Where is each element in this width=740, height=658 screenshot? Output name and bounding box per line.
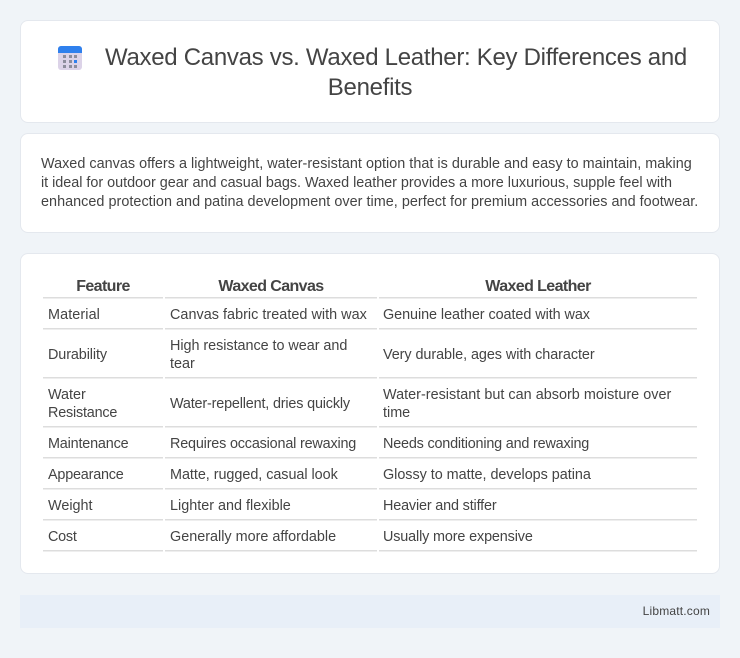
title: Benefits xyxy=(328,74,412,101)
intro text: enhanced protection and patina development over time, perfect for premium accessories and footwear. xyxy=(41,194,698,210)
row: cost: Generally more affordable xyxy=(170,529,336,545)
row: material: Material xyxy=(48,307,100,323)
row: maintenance: Requires occasional rewaxing xyxy=(170,436,356,452)
row: cost: Cost xyxy=(48,529,77,545)
row: weight xyxy=(48,498,496,514)
row: weight: Heavier and stiffer xyxy=(383,498,496,514)
row: maintenance: Maintenance xyxy=(48,436,128,452)
row: material: Canvas fabric treated with wax xyxy=(170,307,367,323)
row: water resistance: Water-repellent, dries quickly xyxy=(170,396,350,412)
column headers: Waxed Canvas xyxy=(218,278,324,295)
row: water resistance: Resistance xyxy=(48,405,117,421)
intro text: Waxed canvas offers a lightweight, water-resistant option that is durable and easy to maintain, making xyxy=(41,156,692,172)
row: cost xyxy=(48,529,533,545)
row: water resistance: Water-resistant but can absorb moisture over xyxy=(383,387,671,403)
column headers: Feature xyxy=(76,278,130,295)
row: durability: tear xyxy=(170,356,195,372)
row: water resistance: time xyxy=(383,405,410,421)
column headers xyxy=(76,278,592,295)
row: material xyxy=(48,307,590,323)
row: durability: Durability xyxy=(48,347,107,363)
table card xyxy=(20,253,720,574)
header card xyxy=(20,20,720,123)
row: appearance: Matte, rugged, casual look xyxy=(170,467,338,483)
row: maintenance: Needs conditioning and rewaxing xyxy=(383,436,589,452)
intro card xyxy=(20,133,720,233)
row: weight: Lighter and flexible xyxy=(170,498,291,514)
column headers: Waxed Leather xyxy=(485,278,591,295)
intro text: it ideal for outdoor gear and casual bags. Waxed leather provides a more luxurious, supple feel with xyxy=(41,175,672,191)
row: durability: High resistance to wear and xyxy=(170,338,347,354)
row: maintenance xyxy=(48,436,589,452)
row: weight: Weight xyxy=(48,498,93,514)
row: water resistance xyxy=(48,387,672,421)
row: appearance xyxy=(48,467,591,483)
intro text xyxy=(41,156,698,210)
row: appearance: Glossy to matte, develops patina xyxy=(383,467,591,483)
row: water resistance: Water xyxy=(48,387,86,403)
footer credit: Libmatt.com xyxy=(643,604,710,618)
comparison table xyxy=(43,278,697,552)
row: appearance: Appearance xyxy=(48,467,124,483)
footer bar xyxy=(20,595,720,628)
row: material: Genuine leather coated with wax xyxy=(383,307,590,323)
row: durability: Very durable, ages with character xyxy=(383,347,595,363)
title: Waxed Canvas vs. Waxed Leather: Key Differences and xyxy=(105,44,687,71)
title xyxy=(105,44,687,101)
row: cost: Usually more expensive xyxy=(383,529,533,545)
row: durability xyxy=(48,338,595,372)
icon: calendar xyxy=(58,46,82,70)
